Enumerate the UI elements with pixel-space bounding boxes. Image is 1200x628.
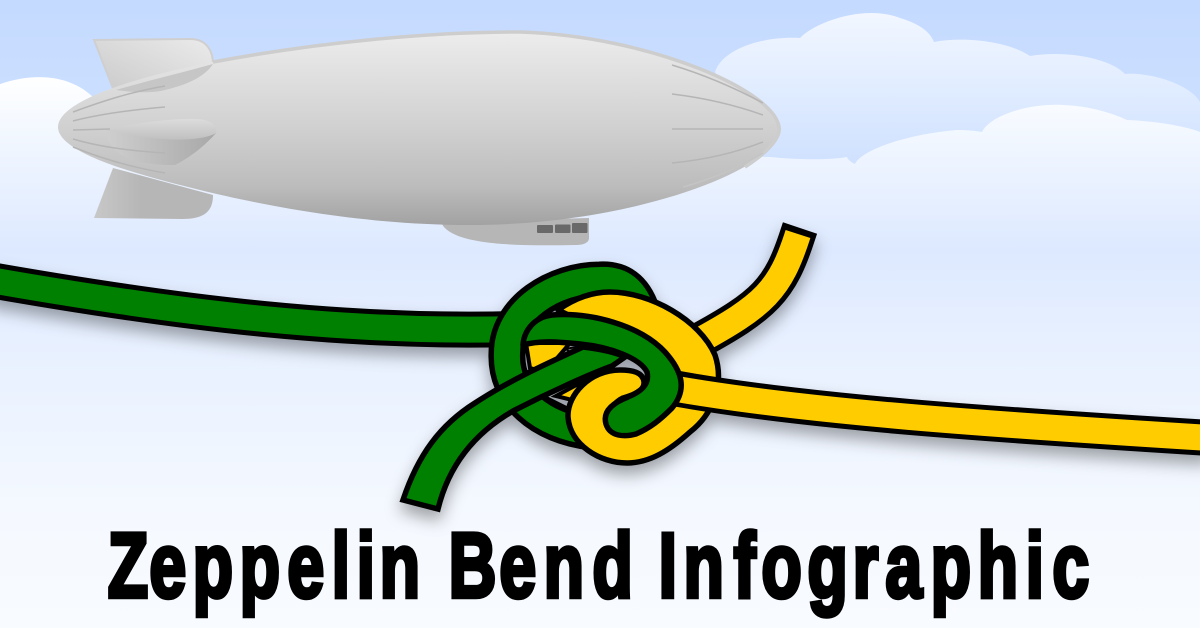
yellow spiral loop: [558, 292, 718, 463]
zeppelin bottom tail fin: [94, 168, 213, 219]
zeppelin top tail fin: [94, 39, 213, 96]
title: Zeppelin Bend Infographic: [108, 513, 1089, 617]
zeppelin: [58, 32, 781, 245]
zeppelin hull: [58, 33, 781, 225]
green inner hook: [523, 315, 681, 436]
hull top rim: [213, 32, 779, 167]
hull shading near top fin: [116, 64, 213, 92]
rope fragments seen through the knot: [526, 343, 590, 418]
green outer loop: [507, 280, 642, 432]
green diagonal tail: [403, 347, 625, 509]
green standing rope: [0, 280, 515, 330]
yellow tail rope: [695, 228, 800, 343]
hull rib lines: [73, 65, 763, 187]
gondola windows: [537, 223, 588, 233]
cloud: upper right back: [715, 13, 1200, 200]
zeppelin bend knot: [0, 228, 1200, 509]
yellow standing rope: [660, 386, 1200, 438]
zeppelin gondola: [441, 218, 589, 245]
side fin: [105, 119, 216, 140]
sky background: [0, 0, 1200, 200]
side fin shadow: [105, 130, 216, 165]
